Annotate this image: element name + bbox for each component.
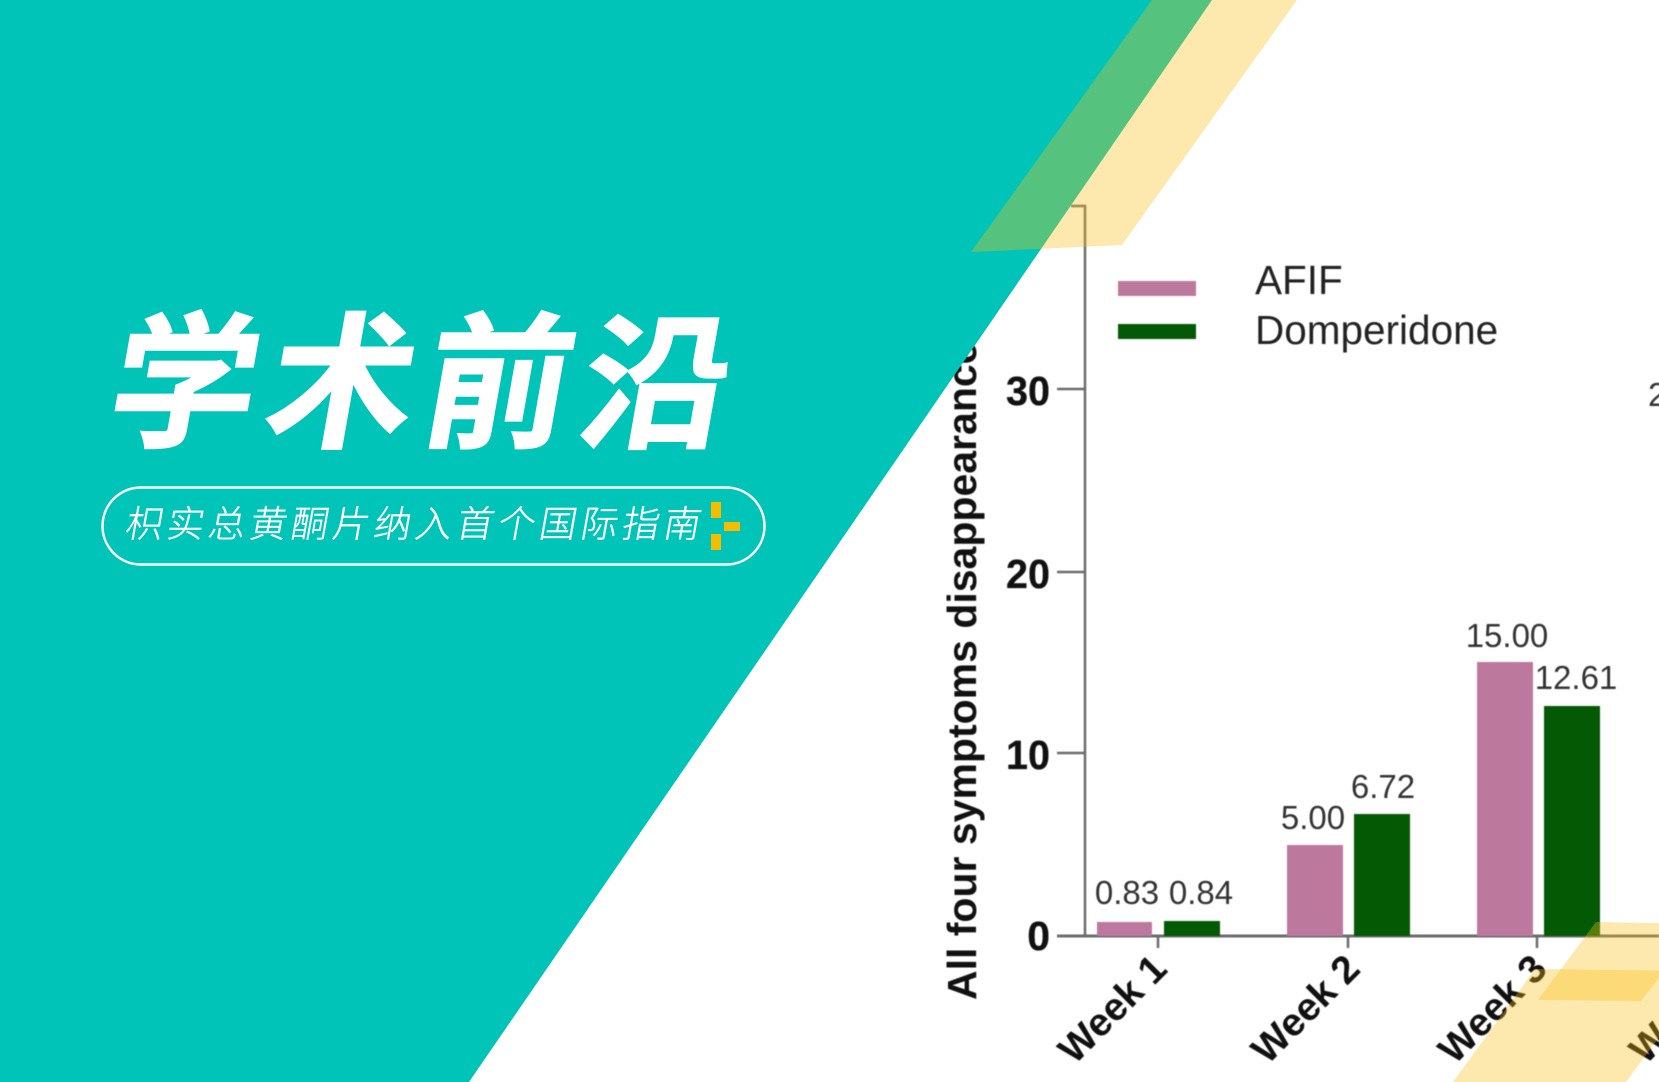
y axis tick labels: 10 (1006, 732, 1050, 778)
bar value labels: 6.72 (1351, 768, 1415, 805)
y axis tick labels: 20 (1006, 551, 1050, 597)
translucent yellow parallelogram bottom upper (1538, 922, 1659, 1001)
legend (1118, 257, 1498, 353)
legend: AFIF (1255, 257, 1343, 303)
x axis week labels (1050, 947, 1659, 1072)
bar value labels: 15.00 (1466, 617, 1548, 654)
icon: yellow marks (711, 502, 740, 550)
y axis tick labels (1006, 368, 1050, 959)
subtitle pill (102, 488, 764, 564)
y axis tick labels: 0 (1027, 913, 1050, 959)
x axis week labels: Week 3 (1430, 947, 1555, 1072)
bar chart: all four symptoms disappearance (939, 206, 1659, 1072)
x axis week labels: Week 1 (1050, 947, 1175, 1072)
title: 学术前沿 (97, 304, 754, 468)
bar value labels: 0.84 (1169, 874, 1233, 911)
x axis week labels: Week 2 (1243, 947, 1368, 1072)
y axis tick labels: 30 (1006, 368, 1050, 414)
bar value labels: 0.83 (1095, 874, 1159, 911)
translucent yellow parallelogram bottom lower (1453, 969, 1659, 1082)
bar value labels: 5.00 (1281, 799, 1345, 836)
bar value labels (1095, 376, 1659, 911)
subtitle text: 枳实总黄酮片纳入首个国际指南 (123, 503, 709, 545)
teal diagonal background panel (0, 0, 1212, 1082)
translucent yellow band top (971, 0, 1297, 252)
y axis line and ticks (1057, 206, 1659, 948)
bar value labels: 12.61 (1535, 659, 1617, 696)
bars (1097, 662, 1600, 936)
legend: Domperidone (1255, 307, 1498, 353)
y axis title: All four symptoms disappearance (939, 342, 985, 1000)
